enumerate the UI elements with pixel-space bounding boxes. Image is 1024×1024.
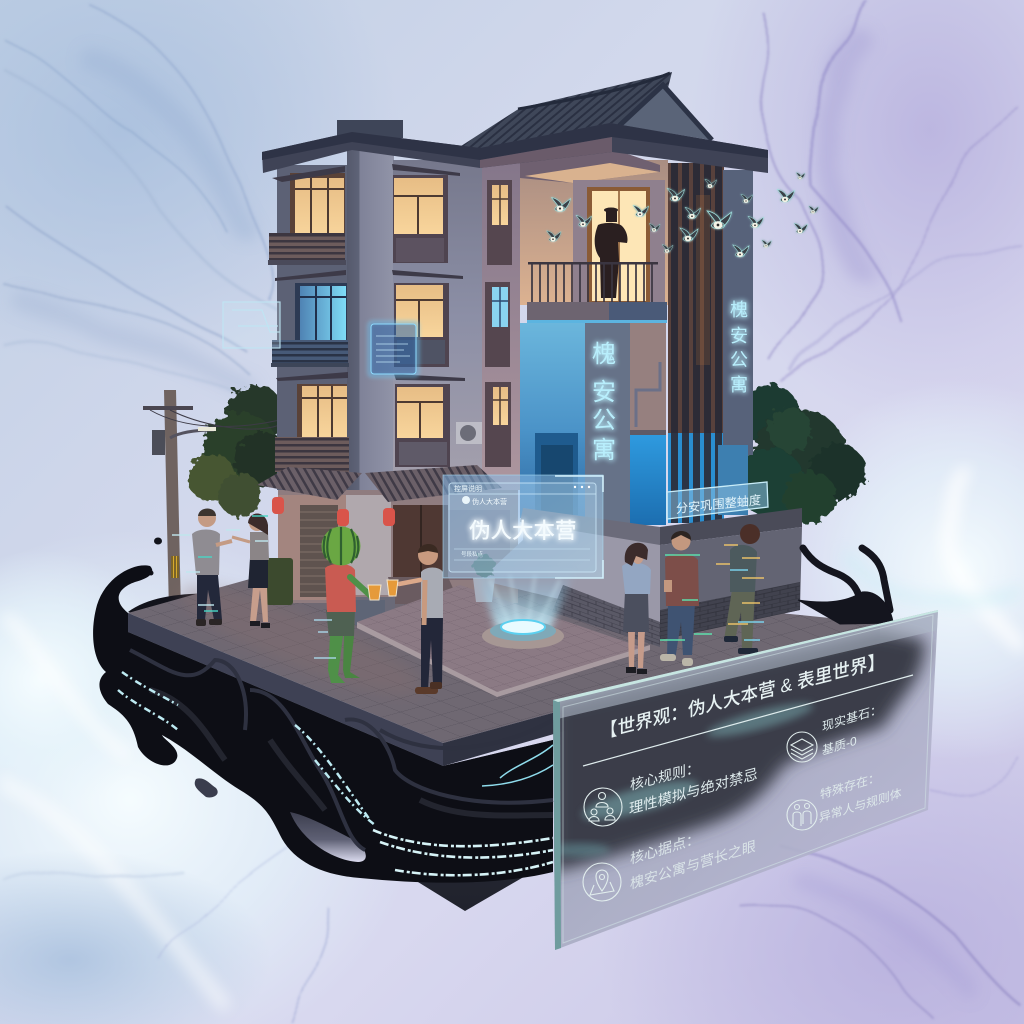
main hologram panel: 号段私点 (461, 550, 484, 558)
item: special beings: 特殊存在： (820, 769, 880, 802)
building (257, 72, 768, 625)
panel title: 【世界观：伪人大本营 & 表里世界】 (600, 650, 885, 743)
courtyard raised pavement (357, 585, 650, 697)
red lanterns (272, 497, 395, 526)
vertical slats (668, 163, 724, 523)
drink cup (368, 585, 381, 600)
person: man talking by the pole (192, 508, 232, 626)
ground floor (278, 485, 518, 625)
small hologram sign: 分安巩围整蚰度 (676, 492, 761, 516)
holo screen on the column (369, 322, 418, 376)
item: special beings: 异常人与规则体 (819, 785, 902, 825)
upper balcony recess (520, 148, 668, 305)
item: core rule: 核心规则： (630, 759, 700, 794)
main hologram panel: 伪人大本营 (472, 497, 507, 506)
person: woman in dark skirt (232, 513, 270, 628)
icon: people network (584, 788, 622, 826)
item: reality base (787, 701, 882, 762)
ground floor awnings (257, 465, 502, 502)
potted plant (473, 555, 495, 602)
middle face (393, 160, 483, 475)
frosted ink seen through glass (550, 610, 938, 872)
right face (482, 160, 520, 490)
cyan data streaks (118, 672, 375, 825)
platform paved top (128, 565, 880, 766)
neon sign right: 安 (730, 326, 748, 346)
glossy folds (130, 650, 553, 850)
neon sign right: 公 (730, 350, 748, 370)
neon sign right (730, 300, 748, 395)
small hologram sign (667, 482, 768, 519)
left side wall (277, 165, 349, 490)
right column (723, 170, 753, 455)
neon sign left: 槐 (592, 341, 616, 368)
glass panel (550, 610, 938, 950)
left column windows and balconies (268, 173, 349, 472)
holo screen left of the building (223, 302, 280, 348)
item: core rule: 理性模拟与绝对禁忌 (629, 766, 758, 818)
neon sign right: 槐 (730, 300, 748, 320)
hologram projector (475, 570, 575, 649)
orange drink cup (387, 580, 398, 596)
narrow windows (485, 180, 512, 467)
main tiled roof (458, 72, 712, 150)
item: reality base: 现实基石： (822, 701, 882, 734)
item: core stronghold (583, 830, 756, 901)
person: woman on phone (622, 543, 651, 674)
item: special beings (787, 769, 902, 830)
utility pole with street lamp (143, 390, 280, 612)
window awnings (272, 164, 465, 381)
panel caption: 控屏说明 (454, 484, 482, 493)
ink splash right (798, 548, 893, 624)
item: core rule (584, 759, 758, 826)
watermelon head (322, 526, 360, 566)
neon sign left: 安 (592, 379, 616, 406)
panel heading: 伪人大本营 (469, 519, 577, 543)
person: man toasting (387, 544, 443, 694)
silhouette of the camp commander (595, 208, 627, 298)
item: reality base: 基质-0 (822, 734, 857, 758)
icon: two figures (787, 800, 817, 830)
neon sign left (592, 341, 616, 464)
green bin (266, 558, 293, 605)
balcony railing (527, 262, 667, 323)
icon: stacked layers (787, 732, 817, 762)
neon sign left: 公 (592, 407, 616, 434)
person: watermelon-head figure (322, 526, 381, 683)
tree left, behind building (188, 385, 290, 517)
person: man in red sweater (660, 531, 699, 666)
ink mass wrapping the platform (93, 565, 553, 883)
neon sign right: 寓 (730, 375, 748, 395)
ink splash behind platform (128, 538, 290, 797)
main hologram panel (443, 475, 603, 578)
tree right, behind wall (736, 385, 866, 523)
hole in the ink (290, 812, 366, 862)
item: core stronghold: 槐安公寓与营长之眼 (630, 837, 756, 893)
glitch streaks on figures (172, 516, 764, 658)
middle column windows (393, 175, 450, 467)
garden wall (480, 508, 802, 647)
right wall blue section (520, 322, 666, 525)
slab underside (128, 632, 553, 911)
person: glitching man (724, 524, 760, 654)
swarm of winged eyes (547, 172, 818, 257)
roof cornice (262, 120, 768, 173)
corner column (347, 150, 394, 490)
item: core stronghold: 核心据点： (630, 830, 700, 868)
icon: map pin (583, 863, 621, 901)
neon sign left: 寓 (592, 437, 616, 464)
air conditioner (456, 422, 482, 444)
ink splash droplets (148, 538, 218, 797)
